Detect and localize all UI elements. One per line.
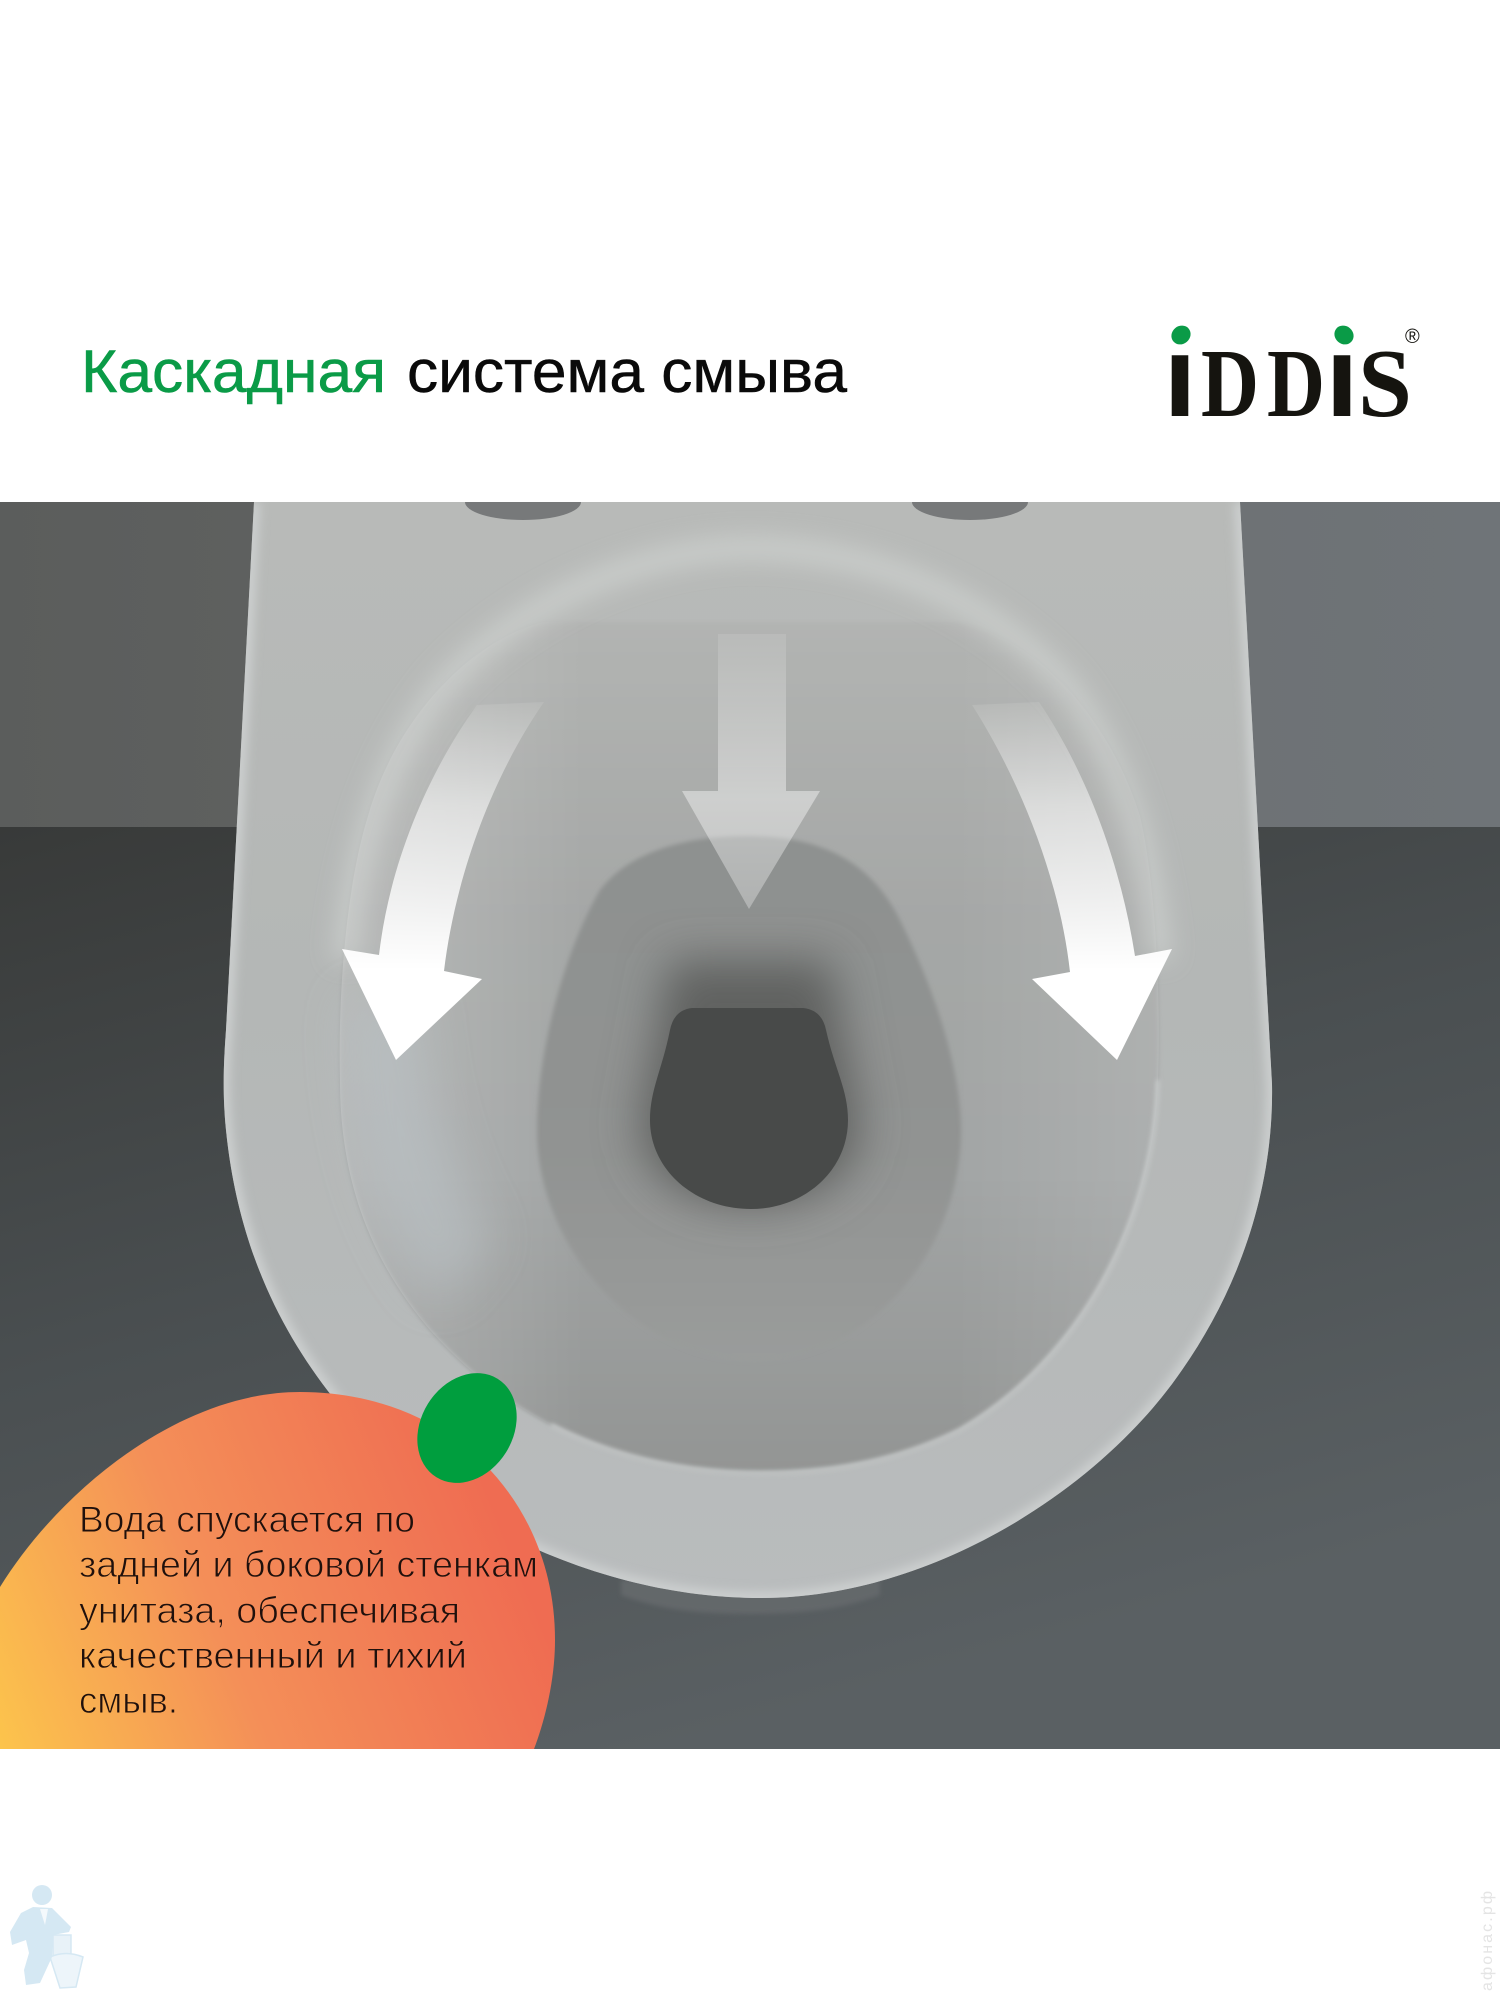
- bowl interior: [340, 622, 1159, 1473]
- rim highlight: [345, 548, 1160, 960]
- logo dots: [1168, 322, 1357, 348]
- logo: IDDIS: I: [1326, 336, 1358, 435]
- title: [81, 338, 848, 405]
- drain hole: [650, 1008, 848, 1209]
- toilet tank and bowl: [53, 1935, 71, 1956]
- logo: IDDIS: D: [1201, 330, 1259, 437]
- toilet base: [621, 1580, 880, 1614]
- bowl lower left reflection: [376, 1032, 478, 1279]
- logo: IDDIS: [1164, 322, 1420, 437]
- arrow: centre: [682, 634, 820, 909]
- callout text: качественный и тихий: [79, 1635, 467, 1676]
- callout text: задней и боковой стенкам: [79, 1544, 538, 1585]
- logo: IDDIS: ®: [1405, 326, 1420, 348]
- callout blob: [0, 1392, 555, 1749]
- watermark site name: афонас.рф: [1479, 1891, 1496, 1991]
- icon: plumber watermark: [10, 1885, 83, 1988]
- inner rim line: [551, 1080, 1158, 1473]
- title: Каскадная: [81, 338, 386, 405]
- arrow: left: [342, 702, 544, 1060]
- logo: IDDIS: D: [1267, 330, 1325, 437]
- floor background: [0, 827, 1500, 1749]
- throat shadow: [640, 960, 860, 1205]
- figure: [32, 1885, 52, 1905]
- callout text: [79, 1499, 538, 1721]
- green accent blob: [417, 1373, 517, 1483]
- logo: IDDIS: I: [1164, 336, 1196, 435]
- arrow: right: [972, 702, 1172, 1060]
- callout text: унитаза, обеспечивая: [79, 1590, 460, 1631]
- seat mounting holes: [465, 502, 581, 520]
- rim outer edge light: [224, 502, 1272, 1598]
- callout text: смыв.: [79, 1680, 178, 1721]
- toilet body: [224, 484, 1272, 1598]
- bowl side brightening: [340, 696, 1158, 1376]
- panel: product photo: [0, 484, 1500, 1749]
- water well: [536, 836, 962, 1266]
- title: система смыва: [407, 338, 848, 405]
- callout text: Вода спускается по: [79, 1499, 415, 1540]
- logo: IDDIS: S: [1358, 330, 1412, 437]
- wall background: [0, 502, 1500, 827]
